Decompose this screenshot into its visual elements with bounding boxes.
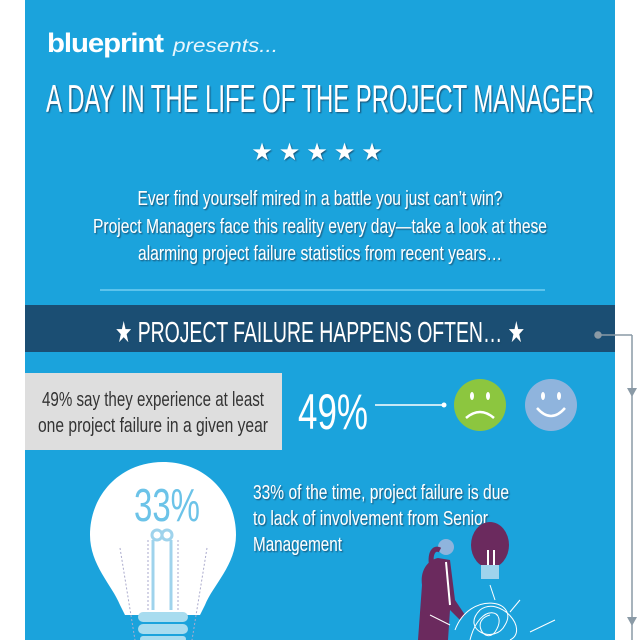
text: 33% senior management: Management [253, 534, 342, 556]
stars: ★★★★★ [251, 139, 389, 166]
stat box: 49%: 49% say they experience at least [42, 389, 264, 411]
text: 33% senior management [253, 482, 509, 556]
big number 49%: 49% [298, 384, 368, 440]
icon: sad face [454, 379, 506, 431]
logo: blueprint presents [47, 28, 278, 58]
intro text: alarming project failure statistics from recent years… [138, 243, 502, 265]
logo: blueprint presents: blueprint [47, 28, 164, 58]
text: 33% senior management: 33% of the time, project failure is due [253, 482, 509, 504]
stat box: 49%: one project failure in a given year [38, 415, 268, 437]
icon: light bulb 33%: 33% [134, 479, 200, 531]
section header band [25, 305, 615, 352]
intro text [93, 188, 547, 265]
intro text: Ever find yourself mired in a battle you just can’t win? [138, 188, 502, 210]
stat box: 49% [25, 373, 282, 450]
illustration: confused manager with bulb [418, 522, 555, 640]
icon: happy face [525, 379, 577, 431]
arrow: timeline connector [595, 332, 637, 640]
text: 33% senior management: to lack of involvement from Senior [253, 508, 488, 530]
icon: light bulb 33% [90, 462, 236, 640]
logo: blueprint presents: presents... [172, 36, 278, 57]
